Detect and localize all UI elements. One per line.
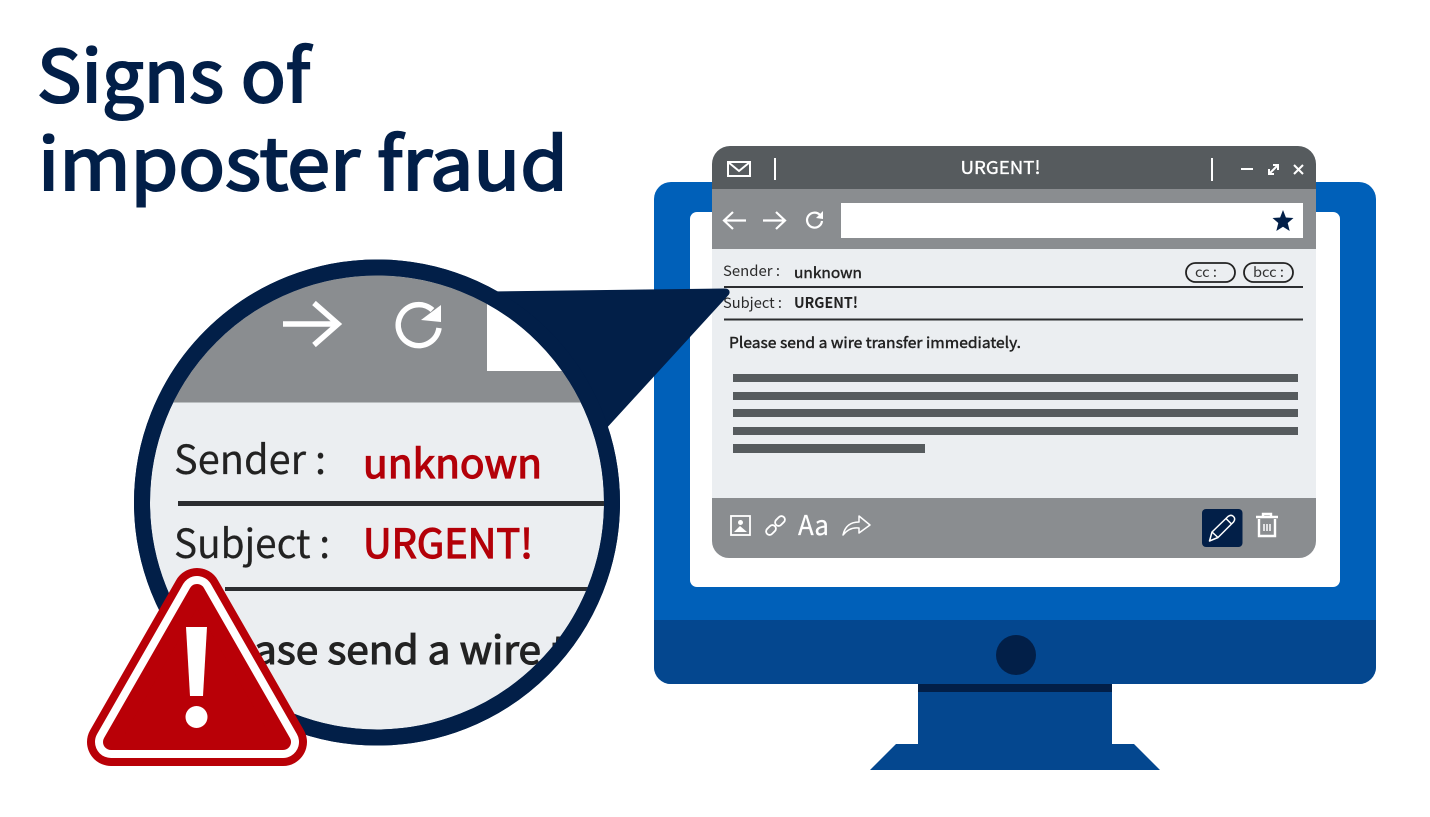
cc button: cc : bbox=[1195, 262, 1217, 282]
icon: back arrow bbox=[724, 212, 746, 229]
header fields bbox=[723, 260, 1303, 320]
lens content bbox=[174, 276, 604, 665]
cc button bbox=[1186, 262, 1235, 282]
subject field: Subject : bbox=[723, 292, 782, 313]
email window bbox=[712, 146, 1316, 558]
icon: star bbox=[1272, 210, 1294, 231]
window controls bbox=[1241, 165, 1303, 174]
message text: Please send a wire transfer immediately. bbox=[729, 332, 1021, 353]
window title: URGENT! bbox=[960, 154, 1040, 180]
address bar bbox=[841, 203, 1303, 238]
camera button bbox=[996, 635, 1036, 675]
zoomed message: Please send a wire bbox=[195, 620, 541, 676]
monitor chin bbox=[654, 620, 1376, 684]
zoomed subject: Subject : bbox=[174, 512, 330, 570]
lens content: URGENT! bbox=[363, 512, 533, 570]
title: Signs of bbox=[37, 18, 313, 123]
message placeholder lines bbox=[733, 374, 1298, 453]
header fields: unknown bbox=[794, 262, 862, 283]
format text icon: Aa bbox=[798, 504, 829, 543]
browser toolbar bbox=[712, 189, 1316, 249]
icon: zoomed forward arrow bbox=[283, 303, 338, 345]
monitor stand bbox=[870, 684, 1160, 770]
icon: forward arrow bbox=[763, 212, 785, 229]
zoomed toolbar bbox=[174, 276, 580, 402]
icon: envelope bbox=[728, 162, 750, 176]
monitor screen bbox=[690, 212, 1340, 587]
header fields: URGENT! bbox=[794, 292, 858, 313]
sender field: Sender : bbox=[723, 260, 780, 281]
message body background bbox=[712, 240, 1316, 505]
desktop monitor bbox=[654, 182, 1376, 770]
icon: forward bbox=[843, 516, 870, 535]
zoomed address bar bbox=[487, 304, 562, 371]
magnifier callout wedge bbox=[490, 288, 730, 431]
lens content: unknown bbox=[363, 432, 542, 490]
warning triangle icon bbox=[111, 592, 283, 742]
bcc button: bcc : bbox=[1253, 262, 1284, 282]
bcc button bbox=[1244, 262, 1293, 282]
icon: image bbox=[731, 516, 750, 535]
icon: reload bbox=[807, 211, 823, 228]
icon: zoomed reload bbox=[398, 305, 441, 346]
compose button bbox=[1202, 509, 1242, 547]
zoomed sender: Sender : bbox=[174, 428, 326, 486]
lens content: t bbox=[552, 620, 567, 676]
title bbox=[37, 18, 568, 211]
title: imposter fraud bbox=[38, 106, 568, 211]
magnifier lens bbox=[130, 260, 630, 738]
title bar bbox=[712, 146, 1316, 189]
lens ring bbox=[142, 268, 612, 738]
exclamation mark bbox=[186, 627, 208, 728]
icon: trash bbox=[1256, 514, 1278, 536]
icon: link bbox=[765, 515, 786, 536]
monitor body bbox=[654, 182, 1376, 684]
bottom toolbar bbox=[712, 498, 1316, 558]
